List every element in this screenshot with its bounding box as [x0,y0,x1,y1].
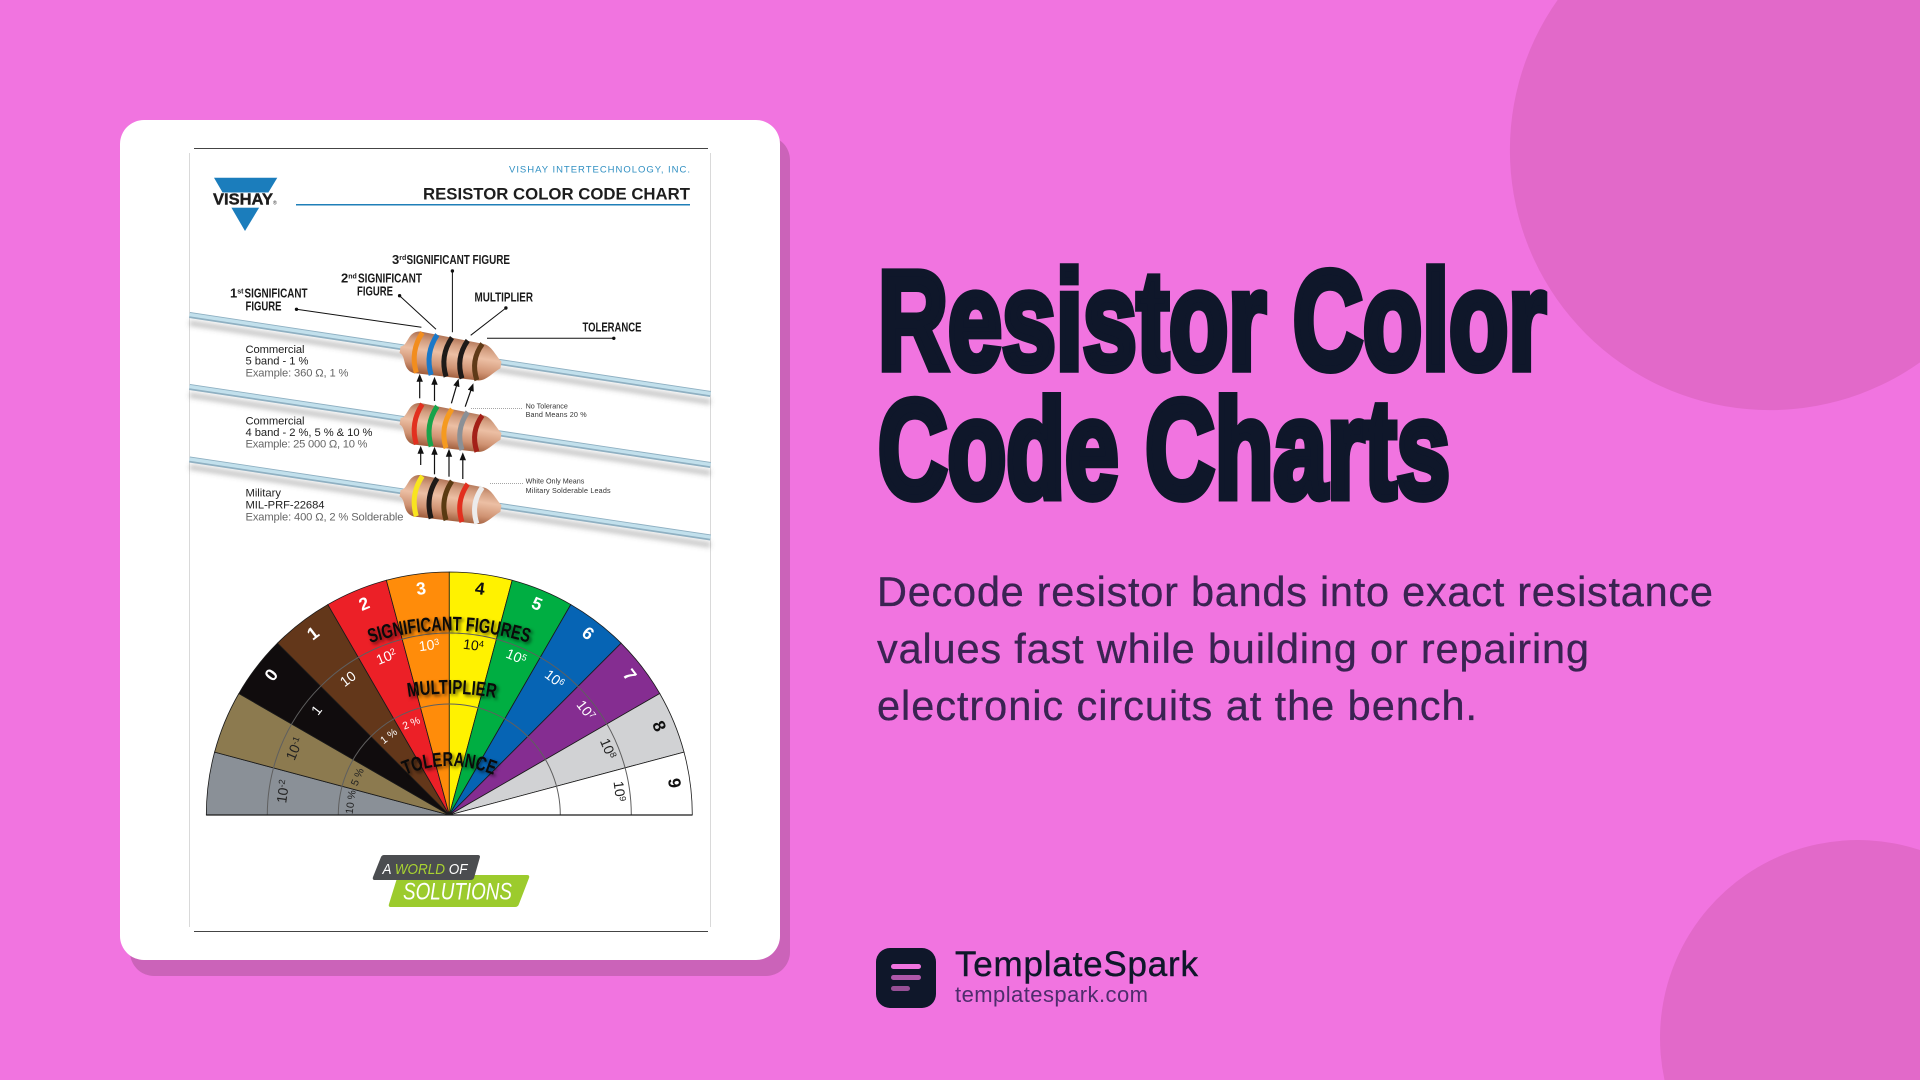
multiplier labels: 10 [337,667,359,690]
brand url: templatespark.com [955,982,1148,1007]
text: commercial 4 band: 4 band - 2 %, 5 % & 10 % [246,427,373,439]
title rule [296,204,690,206]
text: commercial 5 band: Commercial [246,344,304,356]
multiplier labels: 8 [608,751,619,759]
label: 3rd significant figure: 3 [392,252,399,267]
band callouts [230,252,642,339]
heading [878,242,1546,528]
text: military: Military [246,488,281,500]
icon: TemplateSpark logo [876,948,936,1008]
label: 2nd significant figure: FIGURE [357,284,393,299]
text: military: Example: 400 Ω, 2 % Solderable [246,511,404,523]
resistor: 4 band [397,400,504,457]
multiplier labels: 10 [542,666,564,688]
digit labels: 8 [648,718,670,735]
label: 1st significant figure: st [237,289,244,296]
digit labels: 4 [474,578,486,599]
resistor wires [190,315,710,545]
digit labels: 2 [356,593,373,615]
label: 1st significant figure: FIGURE [246,299,282,314]
company name: VISHAY INTERTECHNOLOGY, INC. [509,164,690,176]
arc heading: multiplier: MULTIPLIER [407,680,500,701]
description: electronic circuits at the bench. [877,682,1477,729]
chart title: RESISTOR COLOR CODE CHART [423,186,690,204]
arc heading: significant figures: SIGNIFICANT FIGURES [368,616,534,646]
tolerance labels: 10 % [344,789,359,815]
description: values fast while building or repairing [877,625,1589,672]
note: white only means [490,476,611,495]
chart sheet [188,148,712,932]
digit labels [260,578,685,789]
text: military: MIL-PRF-22684 [246,499,324,511]
brand name: TemplateSpark [955,945,1198,984]
multiplier labels: 10 [273,787,291,804]
tolerance labels: 1 % [378,726,400,747]
note: no tolerance band [471,402,587,419]
text: commercial 5 band: 5 band - 1 % [246,356,309,368]
fan wedges [198,564,692,876]
resistor: military [397,472,504,529]
multiplier labels: 1 [308,702,325,718]
decorative circle: bottom right [1660,840,1920,1080]
leader lines [295,270,615,339]
heading: Resistor Color [878,242,1546,399]
multiplier labels: 10 [504,645,524,666]
multiplier labels: 10 [282,742,303,762]
logo: a world of solutions: A WORLD OF [382,861,468,878]
description [877,568,1713,729]
text: commercial 4 band: Example: 25 000 Ω, 10 % [246,439,368,451]
chart: color code fan [206,572,693,816]
multiplier labels: 7 [587,710,598,720]
arc heading: tolerance: TOLERANCE [400,752,500,778]
panel: white card [120,120,780,960]
label: 2nd significant figure: 2 [341,271,348,286]
multiplier labels: 10 [418,636,435,654]
multiplier labels: 3 [433,637,440,647]
label: 1st significant figure: SIGNIFICANT [244,286,308,301]
text: military [246,488,404,523]
icon: Vishay logo: ® [273,199,277,206]
label: 1st significant figure [230,286,308,314]
multiplier labels: 10 [462,636,480,654]
icon: Vishay logo [210,178,282,231]
text: commercial 4 band: Commercial [246,415,304,427]
resistor: 5 band [397,329,504,386]
label: 1st significant figure: 1 [230,286,237,301]
multiplier labels: 10 [374,647,394,668]
label: 2nd significant figure [341,271,422,299]
note: white only means: Military Solderable Leads [526,486,611,495]
text: commercial 4 band [246,415,373,451]
tolerance labels [344,715,422,815]
multiplier labels: 5 [520,652,529,663]
note: white only means: White Only Means [526,476,585,486]
multiplier labels: 9 [618,796,628,802]
multiplier labels: 10 [597,736,618,756]
multiplier labels: -2 [276,779,287,788]
multiplier labels: 6 [557,676,567,687]
digit labels: 5 [529,593,546,615]
digit labels: 7 [619,665,641,685]
digit labels: 1 [303,622,323,644]
text: commercial 5 band [246,344,349,379]
digit labels: 3 [415,578,427,599]
multiplier labels [273,636,629,804]
icon: Vishay logo: VISHAY [213,191,273,208]
heading: Code Charts [878,370,1450,528]
card shadow [130,136,790,976]
decorative circle: top right [1510,0,1920,410]
multiplier labels: 4 [478,639,485,649]
multiplier labels: -1 [289,735,302,746]
arrows between resistors [420,381,471,479]
logo: a world of solutions: SOLUTIONS [403,878,512,906]
digit labels: 9 [664,777,685,789]
multiplier labels: 10 [574,697,596,719]
tolerance labels: 2 % [401,715,422,733]
sheet frame [190,153,710,927]
multiplier labels: 10 [611,780,628,798]
description: Decode resistor bands into exact resistance [877,568,1713,615]
logo: a world of solutions [373,855,529,907]
label: 3rd significant figure: SIGNIFICANT FIGURE [406,252,510,267]
label: multiplier: MULTIPLIER [474,290,533,305]
label: tolerance: TOLERANCE [582,320,642,335]
label: 2nd significant figure: nd [348,274,357,281]
digit labels: 0 [260,665,282,685]
label: 2nd significant figure: SIGNIFICANT [358,271,422,286]
multiplier labels: 2 [388,646,397,657]
digit labels: 6 [578,622,598,644]
note: no tolerance band: Band Means 20 % [526,410,587,419]
label: 3rd significant figure [392,252,510,267]
label: 3rd significant figure: rd [399,255,406,262]
note: no tolerance band: No Tolerance [526,402,568,410]
tolerance labels: 5 % [349,766,367,788]
text: commercial 5 band: Example: 360 Ω, 1 % [246,367,349,379]
